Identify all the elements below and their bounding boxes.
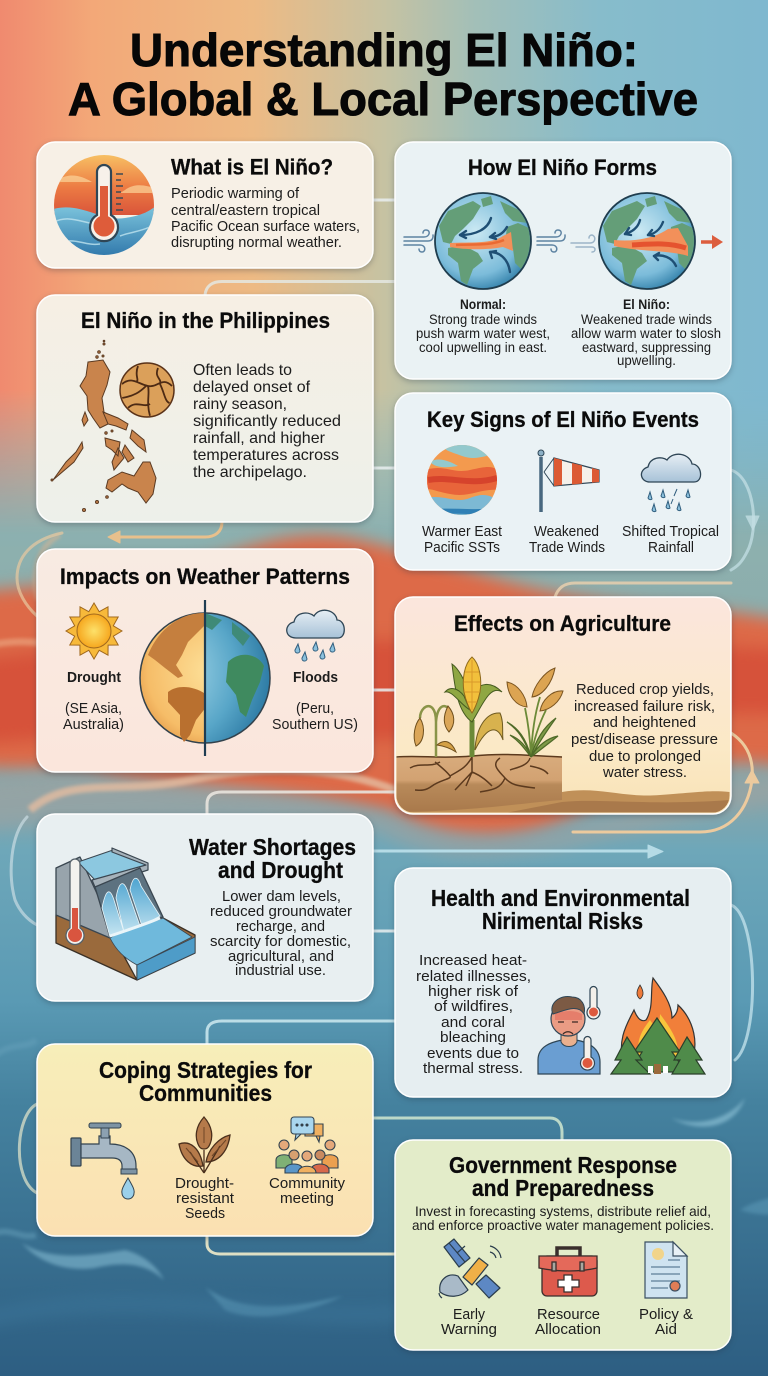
- heading: El Niño in the Philippines: [81, 308, 330, 333]
- labels: [441, 1307, 693, 1338]
- text block: temperatures across: [193, 447, 339, 464]
- text block: the archipelago.: [193, 464, 307, 481]
- sub: wilted plant: [414, 706, 456, 757]
- panel: What is El Niño: [37, 142, 373, 268]
- caption: El Niño: [571, 297, 721, 368]
- connector arrows between panels: [11, 200, 759, 1254]
- text block: disrupting normal weather.: [171, 235, 342, 251]
- text block: thermal stress.: [423, 1060, 523, 1077]
- icon: person with heat illness: [538, 986, 600, 1074]
- text block: delayed onset of: [193, 379, 311, 396]
- text block: agricultural, and: [228, 949, 334, 965]
- text block: recharge, and: [236, 919, 325, 935]
- caption: El Niño: El Niño:: [623, 297, 670, 312]
- text block: central/eastern tropical: [171, 203, 320, 219]
- labels: drought: (SE Asia,: [65, 700, 122, 717]
- icon: strong wind left: [404, 230, 433, 252]
- text block: rainy season,: [193, 396, 287, 413]
- text block: scarcity for domestic,: [210, 934, 351, 950]
- labels: Drought-: [175, 1176, 234, 1192]
- title: A Global & Local Perspective: [68, 73, 698, 125]
- panel: Coping Strategies for Communities: [37, 1044, 373, 1236]
- icon: forest fire: [611, 978, 705, 1074]
- icon: thermometer over ocean: [54, 155, 154, 255]
- heading: Government Response: [449, 1152, 677, 1178]
- labels: Seeds: [185, 1206, 225, 1222]
- text block: Invest in forecasting systems, distribute relief aid,: [415, 1203, 711, 1219]
- icon: sea surface temperature globe: [427, 445, 497, 515]
- icon: sun: [66, 603, 122, 659]
- text block: higher risk of: [428, 983, 519, 1000]
- panel: Effects on Agriculture: [395, 597, 731, 814]
- illustration: dam with thermometer: [56, 848, 195, 980]
- icon: windsock: [538, 450, 599, 512]
- text block: [193, 362, 341, 481]
- labels: floods: [272, 669, 358, 733]
- panel: Key Signs of El Niño Events: [395, 393, 731, 570]
- labels: drought: [63, 669, 124, 733]
- labels: drought: Drought: [67, 669, 121, 686]
- illustration: crops in cracked soil: [396, 657, 730, 814]
- heading: and Drought: [218, 857, 343, 883]
- text block: [571, 681, 718, 781]
- heading: [431, 885, 690, 934]
- icon: rain cloud: [287, 610, 344, 661]
- heading: Key Signs of El Niño Events: [427, 407, 699, 432]
- text block: due to prolonged: [589, 748, 701, 765]
- icon: strong wind centre: [537, 230, 565, 252]
- caption: El Niño: Weakened trade winds: [581, 312, 712, 327]
- icon: first aid kit: [539, 1248, 597, 1296]
- icon: community meeting: [276, 1117, 338, 1173]
- heading: What is El Niño?: [171, 154, 333, 180]
- text block: bleaching: [440, 1029, 506, 1046]
- heading: Effects on Agriculture: [454, 611, 671, 636]
- text block: water stress.: [602, 764, 687, 781]
- labels: Pacific SSTs: [424, 540, 500, 556]
- labels: Weakened: [534, 524, 599, 540]
- labels: Shifted Tropical: [622, 524, 719, 540]
- icon: Philippines map: [51, 340, 156, 512]
- labels: [175, 1176, 346, 1222]
- icon: split globe: [140, 600, 270, 756]
- text block: reduced groundwater: [210, 904, 352, 920]
- caption: El Niño: upwelling.: [617, 353, 676, 368]
- text block: and coral: [441, 1014, 505, 1031]
- labels: Community: [269, 1176, 346, 1192]
- caption: normal: Normal:: [460, 297, 506, 312]
- caption: normal: cool upwelling in east.: [419, 340, 547, 355]
- labels: Rainfall: [648, 540, 694, 556]
- heading: and Preparedness: [472, 1175, 654, 1201]
- labels: Policy &: [639, 1307, 693, 1323]
- labels: Early: [453, 1307, 486, 1323]
- text block: Increased heat-: [419, 952, 527, 969]
- heading: Communities: [139, 1080, 272, 1106]
- icon: normal globe: [435, 193, 531, 289]
- caption: normal: [416, 297, 550, 355]
- text block: Periodic warming of: [171, 186, 300, 202]
- text block: pest/disease pressure: [571, 731, 718, 748]
- labels: drought: Australia): [63, 716, 124, 733]
- panel: El Niño in the Philippines: [37, 295, 373, 522]
- labels: Resource: [537, 1307, 600, 1323]
- panel: Impacts on Weather Patterns: [37, 549, 373, 772]
- text block: [210, 889, 352, 979]
- icon: seed leaves: [179, 1117, 230, 1173]
- icon: eastward arrow: [701, 235, 723, 249]
- title: [68, 24, 698, 125]
- heading: Nirimental Risks: [482, 908, 643, 934]
- icon: policy document: [645, 1242, 687, 1298]
- text block: industrial use.: [235, 963, 326, 979]
- icon: cracked earth: [120, 363, 174, 417]
- labels: Trade Winds: [529, 540, 605, 556]
- panel: Health and Environmental Risks: [395, 868, 731, 1097]
- labels: Aid: [655, 1322, 677, 1338]
- icon: satellite: [439, 1239, 501, 1298]
- text block: significantly reduced: [193, 413, 341, 430]
- text block: [412, 1203, 714, 1233]
- text block: [416, 952, 531, 1077]
- heading: [99, 1057, 312, 1106]
- icon: El Niño globe: [599, 193, 695, 289]
- icon: rain cloud: [641, 454, 701, 512]
- labels: floods: Floods: [293, 669, 338, 686]
- text block: Lower dam levels,: [222, 889, 341, 905]
- labels: resistant: [176, 1191, 234, 1207]
- heading: How El Niño Forms: [468, 155, 657, 180]
- caption: El Niño: allow warm water to slosh: [571, 326, 721, 341]
- title: Understanding El Niño:: [130, 24, 638, 76]
- heading: [189, 834, 356, 883]
- panel: Government Response and Preparedness: [395, 1140, 731, 1350]
- text block: Reduced crop yields,: [576, 681, 714, 698]
- heading: Coping Strategies for: [99, 1057, 312, 1083]
- caption: normal: Strong trade winds: [429, 312, 537, 327]
- caption: normal: push warm water west,: [416, 326, 550, 341]
- caption: El Niño: eastward, suppressing: [582, 340, 711, 355]
- labels: Warning: [441, 1322, 497, 1338]
- labels: Allocation: [535, 1322, 601, 1338]
- text block: Often leads to: [193, 362, 292, 379]
- text block: events due to: [427, 1045, 519, 1062]
- text block: increased failure risk,: [574, 698, 715, 715]
- text block: Pacific Ocean surface waters,: [171, 219, 360, 235]
- labels: meeting: [280, 1191, 334, 1207]
- panel: Water Shortages and Drought: [37, 814, 373, 1001]
- labels: [422, 524, 719, 556]
- icon: faucet with drop: [71, 1123, 137, 1199]
- text block: [171, 186, 360, 251]
- heading: Water Shortages: [189, 834, 356, 860]
- text block: of wildfires,: [434, 998, 513, 1015]
- text block: and enforce proactive water management policies.: [412, 1217, 714, 1233]
- labels: floods: (Peru,: [296, 700, 334, 717]
- sub: rice plant: [507, 668, 563, 757]
- heading: Health and Environmental: [431, 885, 690, 911]
- labels: floods: Southern US): [272, 716, 358, 733]
- heading: Impacts on Weather Patterns: [60, 564, 350, 589]
- icon: weak wind: [571, 235, 595, 252]
- labels: Warmer East: [422, 524, 502, 540]
- text block: and heightened: [593, 714, 696, 731]
- heading: [449, 1152, 677, 1201]
- text block: related illnesses,: [416, 968, 531, 985]
- text block: rainfall, and higher: [193, 430, 326, 447]
- sub: corn plant: [445, 657, 503, 757]
- panel: How El Niño Forms: [395, 142, 731, 379]
